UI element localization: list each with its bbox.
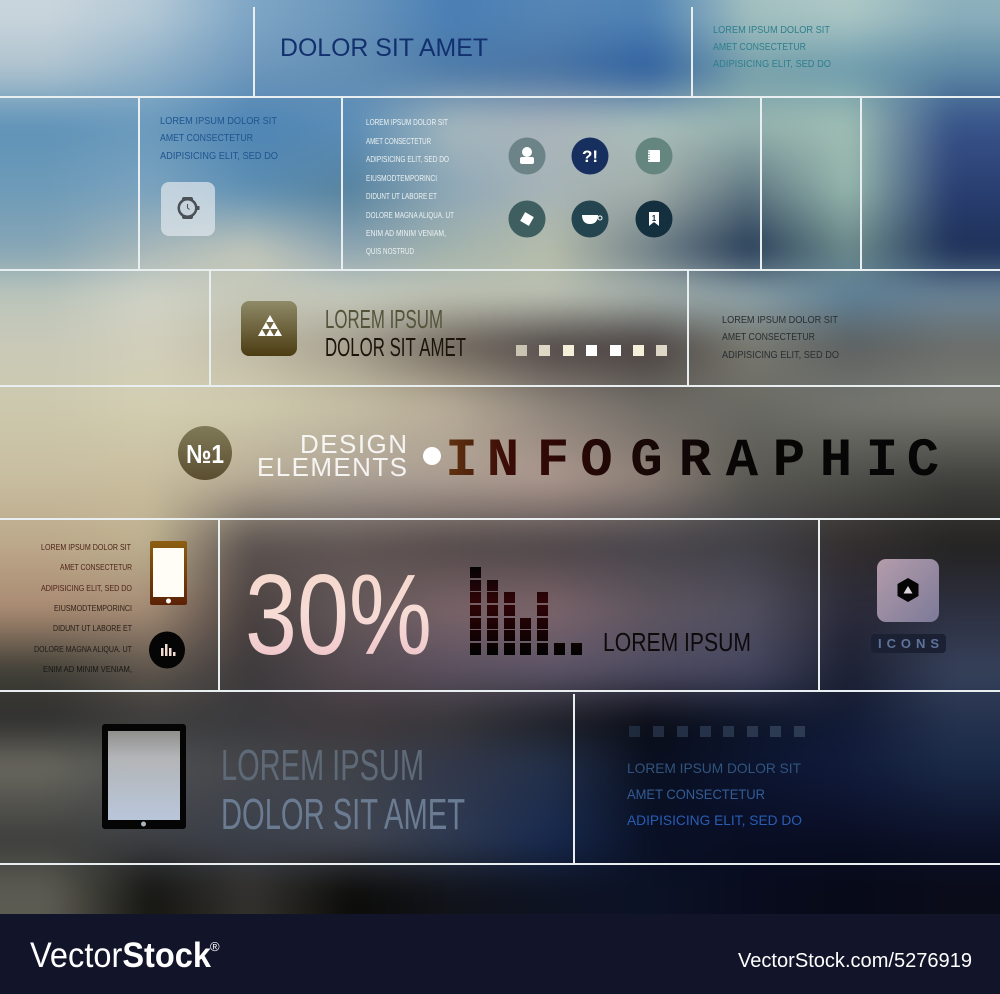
footer bar xyxy=(0,914,1000,994)
text block: top right: ADIPISICING ELIT, SED DO xyxy=(713,58,831,70)
panel: icons badge xyxy=(871,559,946,653)
icon: question exclamation: ?! xyxy=(582,147,598,166)
icon: chart circle xyxy=(149,632,185,668)
text block: paragraph: QUIS NOSTRUD xyxy=(366,247,414,256)
text block: paragraph: LOREM IPSUM DOLOR SIT xyxy=(366,118,448,127)
logo: vectorstock: VectorStock xyxy=(30,936,211,975)
subtitle: design elements: DESIGN xyxy=(300,429,407,459)
text block: blue: AMET CONSECTETUR xyxy=(627,786,765,802)
icon: bookmark: 1 xyxy=(652,214,657,223)
text block: paragraph xyxy=(366,118,454,256)
icon: notebook xyxy=(636,138,672,174)
pagination squares xyxy=(516,345,667,356)
badge: number one: №1 xyxy=(186,439,224,469)
text block: right aligned paragraph: EIUSMODTEMPORINCI xyxy=(54,603,132,613)
text block: right of triangles: LOREM IPSUM DOLOR SIT xyxy=(722,314,839,326)
heading: dolor sit amet: DOLOR SIT AMET xyxy=(221,790,465,839)
panel: phone and text xyxy=(34,541,187,674)
heading: dolor sit amet: DOLOR SIT AMET xyxy=(325,332,466,362)
text block: top right: AMET CONSECTETUR xyxy=(713,41,806,53)
text block: watch panel: AMET CONSECTETUR xyxy=(160,132,253,144)
icon: watch xyxy=(161,182,215,236)
icon: phone xyxy=(150,541,187,605)
icon: hexagon tile xyxy=(877,559,939,622)
subtitle: design elements: ELEMENTS xyxy=(257,452,407,482)
text block: watch panel: ADIPISICING ELIT, SED DO xyxy=(160,150,278,162)
panel: watch text and icon xyxy=(160,115,278,236)
badge: number one xyxy=(178,426,232,480)
text block: paragraph: DOLORE MAGNA ALIQUA. UT xyxy=(366,211,454,220)
text block: right aligned paragraph: ADIPISICING ELIT, SED DO xyxy=(41,583,132,593)
text block: right of triangles: ADIPISICING ELIT, SED DO xyxy=(722,349,839,361)
text block: right of triangles xyxy=(722,314,839,361)
text block: paragraph: EIUSMODTEMPORINCI xyxy=(366,174,437,183)
text block: watch panel: LOREM IPSUM DOLOR SIT xyxy=(160,115,278,127)
panel: dark text xyxy=(627,726,805,828)
icon: triangles box xyxy=(241,301,297,356)
label pill: icons: ICONS xyxy=(878,636,939,651)
text block: blue: LOREM IPSUM DOLOR SIT xyxy=(627,760,801,776)
text block: blue: ADIPISICING ELIT, SED DO xyxy=(627,812,802,828)
text block: paragraph: DIDUNT UT LABORE ET xyxy=(366,192,437,201)
text block: right aligned paragraph: DOLORE MAGNA ALIQUA. UT xyxy=(34,644,132,654)
text block: paragraph: ADIPISICING ELIT, SED DO xyxy=(366,155,449,164)
text block: top right xyxy=(713,24,831,70)
white dot xyxy=(423,447,441,465)
pagination squares xyxy=(629,726,805,737)
panel: triangles heading xyxy=(241,301,667,362)
registered mark: ® xyxy=(210,939,220,954)
panel: thirty percent xyxy=(245,552,751,679)
panel: tablet and heading xyxy=(102,724,465,839)
text block: right aligned paragraph: ENIM AD MINIM VENIAM, xyxy=(43,664,132,674)
icon: cup xyxy=(572,200,608,238)
text block: right aligned paragraph xyxy=(34,542,132,674)
text block: right aligned paragraph: DIDUNT UT LABORE ET xyxy=(53,623,132,633)
text block: top right: LOREM IPSUM DOLOR SIT xyxy=(713,24,831,36)
text block: right of triangles: AMET CONSECTETUR xyxy=(722,331,815,343)
icon: paper xyxy=(508,200,546,238)
big number: 30%: 30% xyxy=(245,552,432,679)
heading: lorem ipsum: LOREM IPSUM xyxy=(221,741,424,790)
text block: paragraph: AMET CONSECTETUR xyxy=(366,137,431,146)
text block: watch panel xyxy=(160,115,278,162)
heading: lorem ipsum: LOREM IPSUM xyxy=(325,304,443,334)
icon: question exclamation xyxy=(572,138,608,174)
footer image id: VectorStock.com/5276919 xyxy=(738,950,972,972)
subtitle: design elements xyxy=(257,429,407,482)
title: infographic: INFOGRAPHIC xyxy=(445,431,939,492)
text block: paragraph: ENIM AD MINIM VENIAM, xyxy=(366,229,446,238)
title banner xyxy=(178,426,939,492)
panel: icons grid and paragraph xyxy=(366,118,672,256)
bar chart xyxy=(470,567,582,655)
icon: bookmark xyxy=(636,200,672,238)
heading: dolor sit amet: DOLOR SIT AMET xyxy=(280,34,488,62)
icon: tablet xyxy=(102,724,186,829)
text block: right aligned paragraph: LOREM IPSUM DOLOR SIT xyxy=(41,542,131,552)
label: lorem ipsum: LOREM IPSUM xyxy=(603,627,751,657)
icon: person xyxy=(508,138,546,174)
text block: right aligned paragraph: AMET CONSECTETUR xyxy=(60,562,132,572)
text block: blue xyxy=(627,760,802,828)
